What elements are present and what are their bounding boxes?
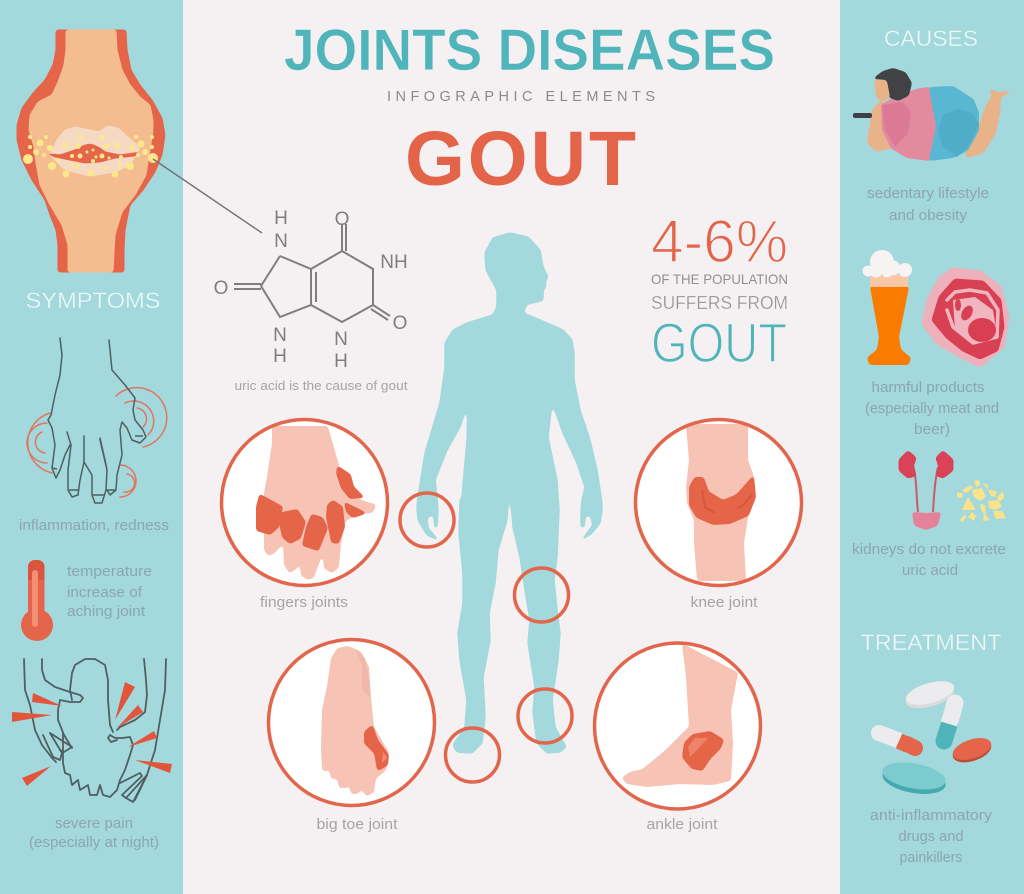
statistic: 4-6%: 4-6% (651, 208, 788, 275)
heading: treatment: TREATMENT (860, 630, 1002, 655)
icon: pills (879, 676, 994, 798)
chart: uric acid molecule: H (334, 351, 348, 372)
icon: sedentary person (853, 69, 1010, 160)
inflamed finger joints (257, 467, 365, 550)
icon: inflamed hand (27, 338, 167, 503)
ring (268, 640, 434, 806)
caption: harmful products: (especially meat and (865, 401, 999, 417)
ring (594, 643, 760, 809)
chart: uric acid molecule: N (273, 325, 287, 346)
text: temperature: temperature (67, 564, 152, 580)
panel: causes and treatment (840, 0, 1024, 894)
marker ring: knee (514, 568, 568, 622)
caption: severe pain (29, 816, 159, 851)
chart: uric acid molecule: H (273, 346, 287, 367)
text: temperature: aching joint (67, 604, 145, 620)
caption: severe pain: (especially at night) (29, 835, 159, 851)
chart: uric acid molecule: H (274, 208, 288, 229)
caption: drugs: anti-inflammatory (870, 808, 993, 824)
inflamed toe joint (365, 726, 388, 770)
icon: inflamed joint (17, 30, 262, 272)
chart: uric acid molecule: O (335, 209, 349, 230)
icon: knee (687, 425, 755, 580)
icon: foot (322, 647, 388, 795)
caption: severe pain: severe pain (55, 816, 133, 832)
panel: big toe joint (268, 640, 434, 806)
statistic: 4-6%: SUFFERS FROM (651, 293, 788, 313)
title: JOINTS DISEASES (284, 18, 775, 83)
label: knee joint: knee joint (690, 595, 758, 611)
icon: hand (265, 427, 375, 579)
chart: uric acid molecule (214, 208, 408, 372)
marker ring: ankle (518, 689, 572, 743)
chart: uric acid molecule: N (334, 329, 348, 350)
chart: uric acid molecule: O (393, 313, 407, 334)
caption: harmful products (865, 380, 999, 438)
panel: knee joint (636, 420, 802, 586)
caption: drugs: painkillers (900, 850, 962, 866)
text: temperature (67, 564, 152, 620)
subtitle: INFOGRAPHIC ELEMENTS (387, 89, 655, 105)
statistic: 4-6%: OF THE POPULATION (651, 271, 788, 287)
caption: kidneys (852, 542, 1006, 579)
icon: beer (862, 250, 912, 364)
caption: sedentary: and obesity (889, 208, 968, 224)
caption: kidneys: uric acid (902, 563, 958, 579)
caption: kidneys: kidneys do not excrete (852, 542, 1006, 558)
panel: fingers joints (222, 420, 388, 586)
inflamed knee (690, 477, 755, 524)
caption: sedentary (867, 186, 989, 224)
chart: uric acid molecule: O (214, 278, 228, 299)
label: fingers joints: fingers joints (260, 595, 348, 611)
label: big toe joint: big toe joint (316, 817, 398, 833)
ring (636, 420, 802, 586)
statistic: 4-6% (651, 208, 788, 374)
caption: drugs (870, 808, 993, 866)
caption: harmful products: beer) (914, 422, 950, 438)
icon: ankle (623, 645, 737, 786)
icon: kidneys (900, 452, 952, 529)
caption: inflammation: inflammation, redness (19, 518, 169, 534)
heading: gout: GOUT (405, 116, 636, 202)
inflamed ankle (683, 732, 723, 770)
ring (222, 420, 388, 586)
caption: uric acid: uric acid is the cause of gout (234, 378, 408, 393)
marker ring: wrist (400, 493, 454, 547)
icon: uric acid crystals (957, 480, 1006, 522)
caption: sedentary: sedentary lifestyle (867, 186, 989, 202)
text: temperature: increase of (67, 585, 143, 601)
icon: painful foot held in hands (12, 659, 172, 802)
panel: symptoms (0, 0, 262, 894)
marker ring: big toe (446, 728, 500, 782)
label: ankle joint: ankle joint (646, 817, 718, 833)
human body silhouette (417, 233, 602, 753)
caption: harmful products: harmful products (872, 380, 984, 396)
panel: ankle joint (594, 643, 760, 809)
icon: meat (923, 269, 1008, 366)
caption: drugs: drugs and (898, 829, 964, 845)
chart: uric acid molecule: NH (380, 252, 408, 273)
icon: thermometer (21, 560, 53, 641)
chart: uric acid molecule: N (274, 231, 288, 252)
heading: symptoms: SYMPTOMS (26, 288, 160, 313)
statistic: 4-6%: GOUT (651, 311, 787, 374)
heading: causes: CAUSES (884, 26, 978, 51)
